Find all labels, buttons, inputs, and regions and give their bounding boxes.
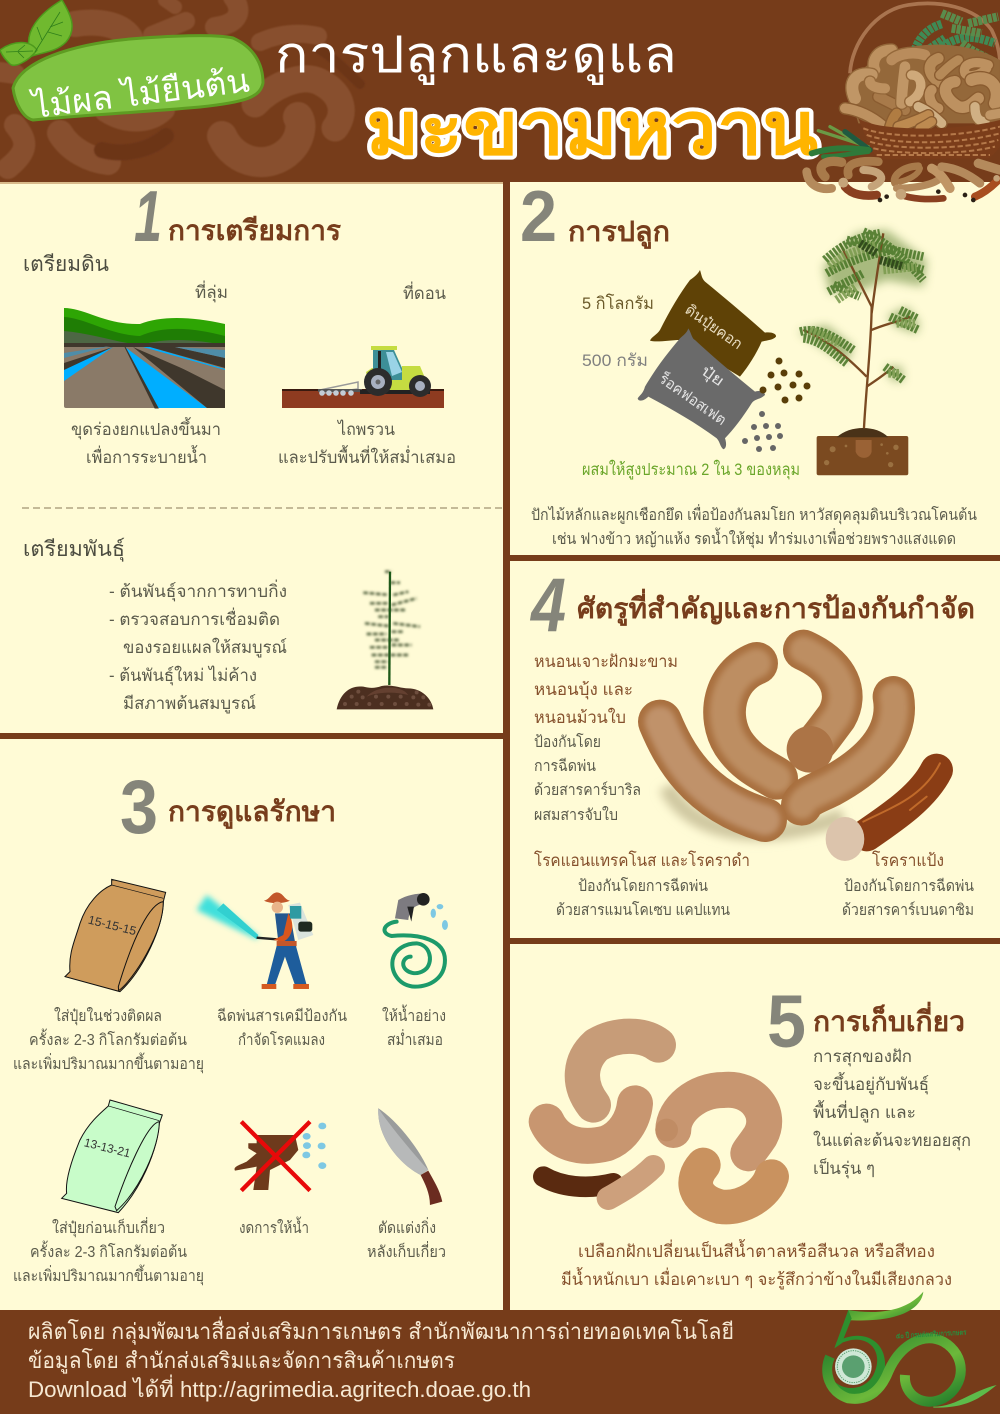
caption: watering	[382, 1004, 446, 1049]
text: powdery mildew: โรคราแป้ง	[872, 850, 944, 870]
image: harvested pods	[543, 1036, 772, 1207]
text: signs of ripeness	[561, 1239, 952, 1290]
list: seedling checks: ของรอยแผลให้สมบูรณ์	[123, 637, 287, 658]
caption: withhold water: งดการให้น้ำ	[239, 1216, 309, 1237]
icon: leaves	[0, 0, 72, 65]
text: insect pests	[534, 652, 678, 824]
text: powdery mildew: ด้วยสารคาร์เบนดาซิม	[842, 901, 974, 919]
list: seedling checks: มีสภาพต้นสมบูรณ์	[123, 694, 256, 714]
basket handle	[850, 3, 1000, 73]
panel: section 2 planting	[520, 177, 977, 549]
loose pods	[807, 161, 1000, 199]
icon: farmer spraying	[197, 892, 313, 989]
caption: spraying: ฉีดพ่นสารเคมีป้องกัน	[217, 1008, 347, 1025]
label: ที่ลุ่ม: ที่ลุ่ม	[195, 280, 228, 303]
icon: rock phosphate bag	[638, 328, 765, 449]
foliage	[913, 13, 998, 63]
caption: fertilize before harvest: ใส่ปุ๋ยก่อนเก็บเกี่ยว	[52, 1217, 165, 1238]
title	[275, 27, 818, 170]
caption: prune: ตัดแต่งกิ่ง	[378, 1217, 436, 1237]
label: ที่ดอน: ที่ดอน	[403, 281, 446, 303]
logo: 50 years	[826, 1292, 997, 1408]
text: insect pests: ผสมสารจับใบ	[534, 806, 618, 824]
text: insect pests: การฉีดพ่น	[534, 758, 596, 775]
caption: fertilize before harvest: และเพิ่มปริมาณมากขึ้นตามอายุ	[13, 1264, 204, 1286]
text: anthracnose and sooty mold	[534, 850, 750, 919]
title: มะขามหวาน	[366, 87, 818, 170]
caption: fertilize during fruiting: และเพิ่มปริมาณมากขึ้นตามอายุ	[13, 1052, 204, 1074]
caption: lowland: เพื่อการระบายน้ำ	[86, 445, 207, 467]
panel dividers	[0, 182, 1000, 1310]
badge: ไม้ผล ไม้ยืนต้น	[0, 0, 263, 125]
text: anthracnose and sooty mold: โรคแอนแทรคโนส และโรคราดำ	[534, 850, 750, 870]
text: staking and mulching advice	[531, 504, 977, 549]
text: ripening: จะขึ้นอยู่กับพันธุ์	[813, 1072, 929, 1095]
text: insect pests: หนอนบุ้ง และ	[534, 680, 633, 700]
image: tamarind pods	[660, 650, 940, 861]
caption: lowland: ขุดร่องยกแปลงขึ้นมา	[71, 417, 221, 440]
badge: ไม้ผล ไม้ยืนต้น: ไม้ผล ไม้ยืนต้น	[28, 62, 251, 125]
text: signs of ripeness: เปลือกฝักเปลี่ยนเป็นสีน้ำตาลหรือสีนวล หรือสีทอง	[578, 1239, 935, 1261]
footer: ผลิตโดย กลุ่มพัฒนาสื่อส่งเสริมการเกษตร สำนักพัฒนาการถ่ายทอดเทคโนโลยี	[28, 1316, 734, 1345]
title: การปลูกและดูแล	[275, 27, 677, 85]
heading: การเตรียมการ: การเตรียมการ	[168, 215, 341, 246]
text: staking and mulching advice: เช่น ฟางข้าว หญ้าแห้ง รดน้ำให้ชุ่ม ทำร่มเงาเพื่อช่วยพรางแสงแดด	[552, 527, 956, 549]
caption: lowland	[71, 417, 221, 467]
icon: fertilizer bag 15-15-15: 15-15-15	[87, 913, 138, 938]
icon: manure bag	[650, 270, 776, 377]
icon: rock phosphate bag: ร็อคฟอสเฟต	[656, 369, 730, 429]
text: powdery mildew: ป้องกันโดยการฉีดพ่น	[844, 877, 974, 895]
caption: upland: และปรับพื้นที่ให้สม่ำเสมอ	[278, 445, 456, 467]
number 3: 3	[120, 765, 158, 850]
illustration: sapling on mound	[337, 572, 433, 709]
pile of pods	[845, 50, 1000, 128]
list: seedling checks: - ต้นพันธุ์จากการทาบกิ่ง	[109, 579, 287, 602]
number 5: 5	[767, 980, 806, 1063]
text: insect pests: หนอนเจาะฝักมะขาม	[534, 652, 678, 671]
woven basket	[858, 118, 1000, 159]
text: ripening: การสุกของฝัก	[813, 1047, 912, 1067]
caption: fertilize before harvest	[13, 1217, 204, 1286]
icon: rock phosphate bag: ปุ๋ย	[697, 362, 727, 391]
caption: fertilize during fruiting: ครั้งละ 2-3 กิโลกรัมต่อต้น	[29, 1028, 187, 1049]
caption: fertilize during fruiting: ใส่ปุ๋ยในช่วงติดผล	[54, 1007, 162, 1026]
label: 5 กิโลกรัม: 5 กิโลกรัม	[582, 293, 654, 313]
caption: watering: ให้น้ำอย่าง	[382, 1004, 446, 1025]
caption: fertilize during fruiting	[13, 1007, 204, 1074]
subheading: เตรียมดิน: เตรียมดิน	[23, 253, 109, 276]
caption: prune: หลังเก็บเกี่ยว	[367, 1241, 446, 1261]
heading: การเก็บเกี่ยว: การเก็บเกี่ยว	[813, 1001, 965, 1037]
left sprig	[812, 127, 870, 157]
text: insect pests: ด้วยสารคาร์บาริล	[534, 781, 641, 799]
caption: upland	[278, 419, 456, 467]
logo: 50 years: ๕๐ ปี กรมส่งเสริมการเกษตร	[896, 1328, 967, 1340]
heading: pests and control: ศัตรูที่สำคัญและการป้องกันกำจัด	[577, 588, 975, 626]
number 2: 2	[520, 177, 557, 257]
caption: prune	[367, 1217, 446, 1261]
text: signs of ripeness: มีน้ำหนักเบา เมื่อเคาะเบา ๆ จะรู้สึกว่าข้างในมีเสียงกลวง	[561, 1267, 952, 1290]
icon: no watering	[235, 1122, 326, 1191]
note: mixing ratio: ผสมให้สูงประมาณ 2 ใน 3 ของหลุม	[582, 459, 800, 480]
text: insect pests: หนอนม้วนใบ	[534, 707, 626, 727]
icon: fertilizer bag 13-13-21: 13-13-21	[83, 1135, 132, 1160]
illustration: tractor ploughing	[282, 346, 444, 408]
panel: section 4 pests	[529, 563, 975, 919]
icon: fertilizer bag 15-15-15	[65, 879, 166, 992]
text: ripening	[813, 1047, 971, 1179]
panel: section 5 harvest	[543, 980, 971, 1290]
subheading: เตรียมพันธุ์: เตรียมพันธุ์	[23, 537, 125, 562]
icon: grey granules	[742, 411, 783, 452]
list: seedling checks: - ตรวจสอบการเชื่อมติด	[109, 607, 280, 629]
footer: Download ได้ที่ http://agrimedia.agritech.doae.go.th	[28, 1374, 531, 1402]
icon: fertilizer bag 13-13-21	[62, 1100, 162, 1213]
text: insect pests: ป้องกันโดย	[534, 733, 601, 751]
heading: การดูแลรักษา: การดูแลรักษา	[168, 796, 336, 829]
text: ripening: ในแต่ละต้นจะทยอยสุก	[813, 1130, 971, 1151]
caption: upland: ไถพรวน	[336, 419, 395, 439]
number 4: 4	[529, 563, 566, 648]
text: anthracnose and sooty mold: ป้องกันโดยการฉีดพ่น	[578, 877, 708, 895]
list: seedling checks: - ต้นพันธุ์ใหม่ ไม่ค้าง	[109, 665, 257, 686]
icon: pruning knife	[378, 1108, 442, 1205]
footer: ข้อมูลโดย สำนักส่งเสริมและจัดการสินค้าเกษตร	[28, 1348, 455, 1374]
image: basket of tamarind	[807, 3, 1000, 202]
text: powdery mildew	[842, 850, 974, 919]
heading: การปลูก: การปลูก	[568, 216, 670, 249]
icon: garden hose	[384, 893, 448, 987]
icon: brown granules	[760, 358, 810, 404]
header banner	[0, 0, 1000, 182]
number 1: 1	[134, 177, 162, 257]
caption: fertilize before harvest: ครั้งละ 2-3 กิโลกรัมต่อต้น	[30, 1240, 187, 1261]
label: 500 กรัม: 500 กรัม	[582, 351, 648, 370]
illustration: raised beds with water channels	[64, 308, 225, 408]
panel: section 1 preparation	[22, 177, 503, 714]
illustration: tree in planting hole	[798, 230, 927, 475]
caption: spraying: กำจัดโรคแมลง	[238, 1031, 325, 1049]
text: anthracnose and sooty mold: ด้วยสารแมนโคเซบ แคปแทน	[556, 901, 730, 919]
caption: spraying	[217, 1008, 347, 1049]
panel: section 3 care	[13, 765, 448, 1286]
icon: manure bag: ดินปุ๋ยคอก	[681, 301, 746, 354]
text: ripening: เป็นรุ่น ๆ	[813, 1157, 875, 1179]
text: ripening: พื้นที่ปลูก และ	[813, 1100, 916, 1123]
footer	[0, 1292, 1000, 1414]
list: seedling checks	[109, 579, 287, 714]
caption: watering: สม่ำเสมอ	[387, 1029, 443, 1049]
